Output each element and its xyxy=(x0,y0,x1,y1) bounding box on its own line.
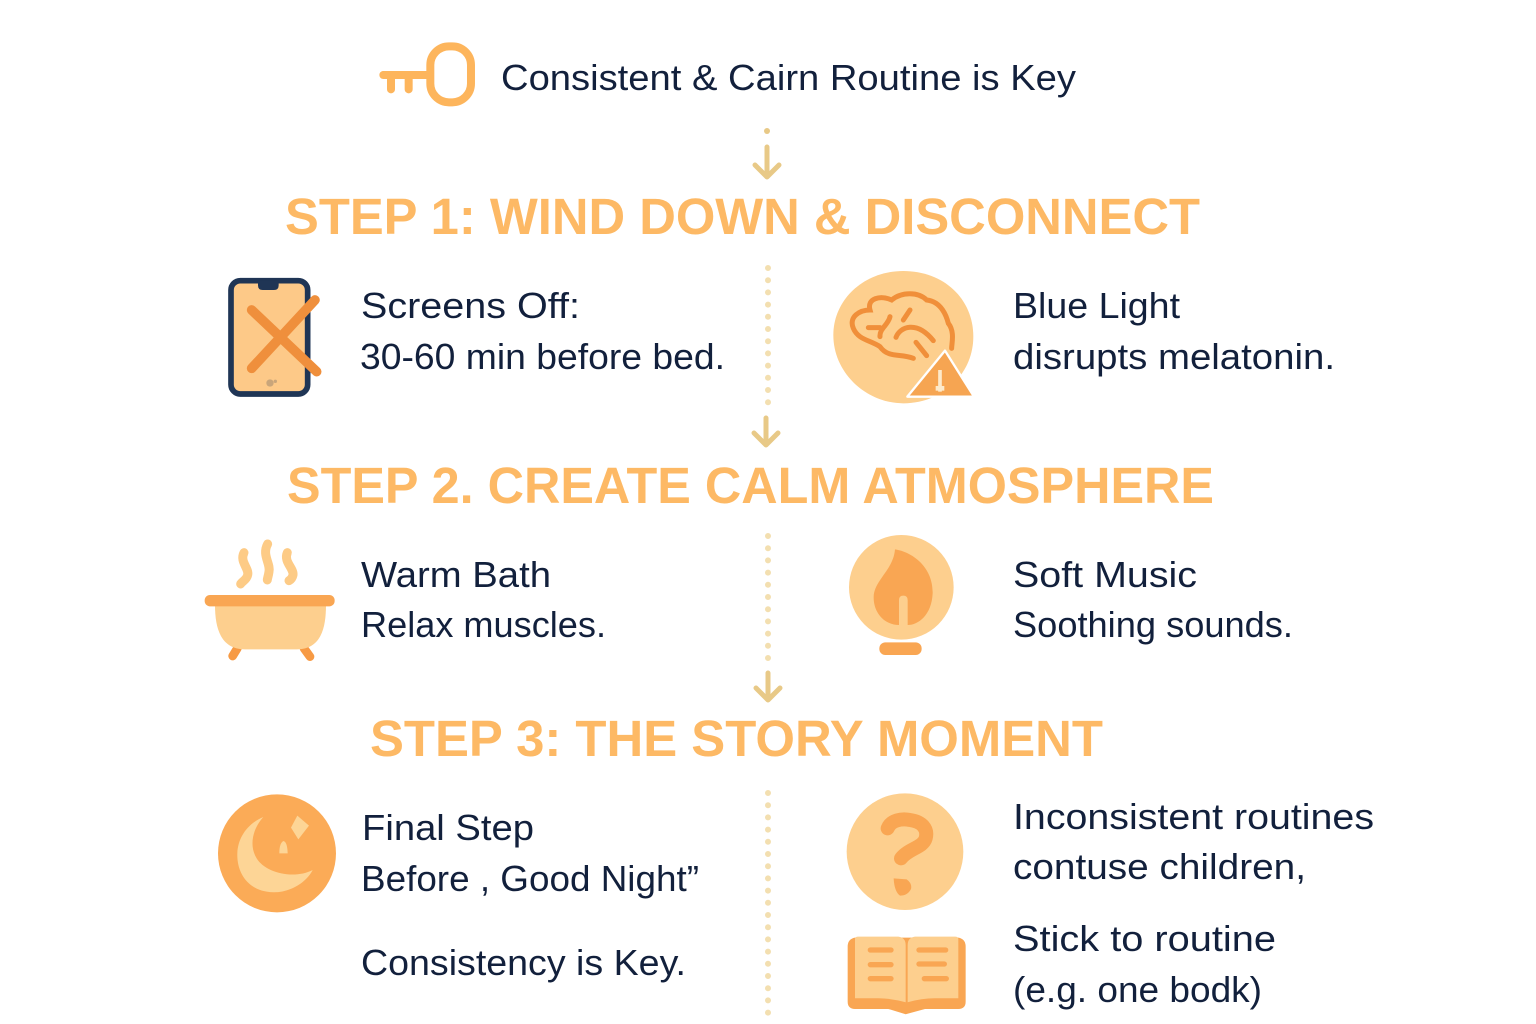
icon: moon and star xyxy=(218,794,336,912)
icon: brain with warning xyxy=(833,271,974,403)
arrow: header to step 1 xyxy=(755,128,779,177)
text: screens off: 30-60 min before bed. xyxy=(360,336,725,377)
text: final step: Final Step xyxy=(362,807,534,848)
text: blue light xyxy=(1013,285,1335,377)
title: Consistent & Cairn Routine is Key xyxy=(501,57,1076,98)
divider: step 3 dotted line xyxy=(765,793,771,1019)
panel: warm bath xyxy=(205,544,606,657)
heading: step 3: STEP 3: THE STORY MOMENT xyxy=(370,710,1103,767)
panel: stick to routine xyxy=(848,918,1276,1014)
text: final step xyxy=(361,807,699,983)
text: stick to routine: Stick to routine xyxy=(1013,918,1276,959)
text: warm bath xyxy=(361,554,606,645)
text: stick to routine: (e.g. one bodk) xyxy=(1013,969,1262,1010)
text: blue light: disrupts melatonin. xyxy=(1013,336,1335,377)
text: soft music: Soothing sounds. xyxy=(1013,604,1293,645)
arrow: step 1 to step 2 xyxy=(754,418,778,445)
text: final step: Before , Good Night” xyxy=(361,858,699,899)
icon: key xyxy=(383,46,471,102)
panel: final step xyxy=(218,794,699,983)
icon: open book xyxy=(848,937,966,1014)
arrow: step 2 to step 3 xyxy=(756,673,780,700)
header: key and routine title xyxy=(383,46,1076,102)
text: screens off: Screens Off: xyxy=(361,285,580,326)
panel: soft music xyxy=(849,535,1293,655)
text: final step: Consistency is Key. xyxy=(361,942,686,983)
panel: screens off xyxy=(231,281,725,394)
divider: step 2 dotted line xyxy=(765,536,771,664)
text: inconsistent routines: Inconsistent routines xyxy=(1013,796,1374,837)
heading: step 1: STEP 1: WIND DOWN & DISCONNECT xyxy=(285,188,1200,245)
text: blue light: Blue Light xyxy=(1013,285,1180,326)
icon: bathtub xyxy=(205,544,335,657)
text: stick to routine xyxy=(1013,918,1276,1010)
text: warm bath: Relax muscles. xyxy=(361,604,606,645)
panel: inconsistent routines xyxy=(847,793,1374,910)
text: soft music xyxy=(1013,554,1293,645)
icon: crossed out phone xyxy=(231,281,317,394)
text: screens off xyxy=(360,285,725,377)
text: soft music: Soft Music xyxy=(1013,554,1197,595)
text: inconsistent routines xyxy=(1013,796,1374,887)
text: inconsistent routines: contuse children, xyxy=(1013,846,1306,887)
panel: blue light xyxy=(833,271,1335,403)
heading: step 2: STEP 2. CREATE CALM ATMOSPHERE xyxy=(287,457,1214,514)
divider: step 1 dotted line xyxy=(765,268,771,414)
icon: flame bulb xyxy=(849,535,954,655)
icon: question mark xyxy=(847,793,963,910)
text: warm bath: Warm Bath xyxy=(361,554,551,595)
